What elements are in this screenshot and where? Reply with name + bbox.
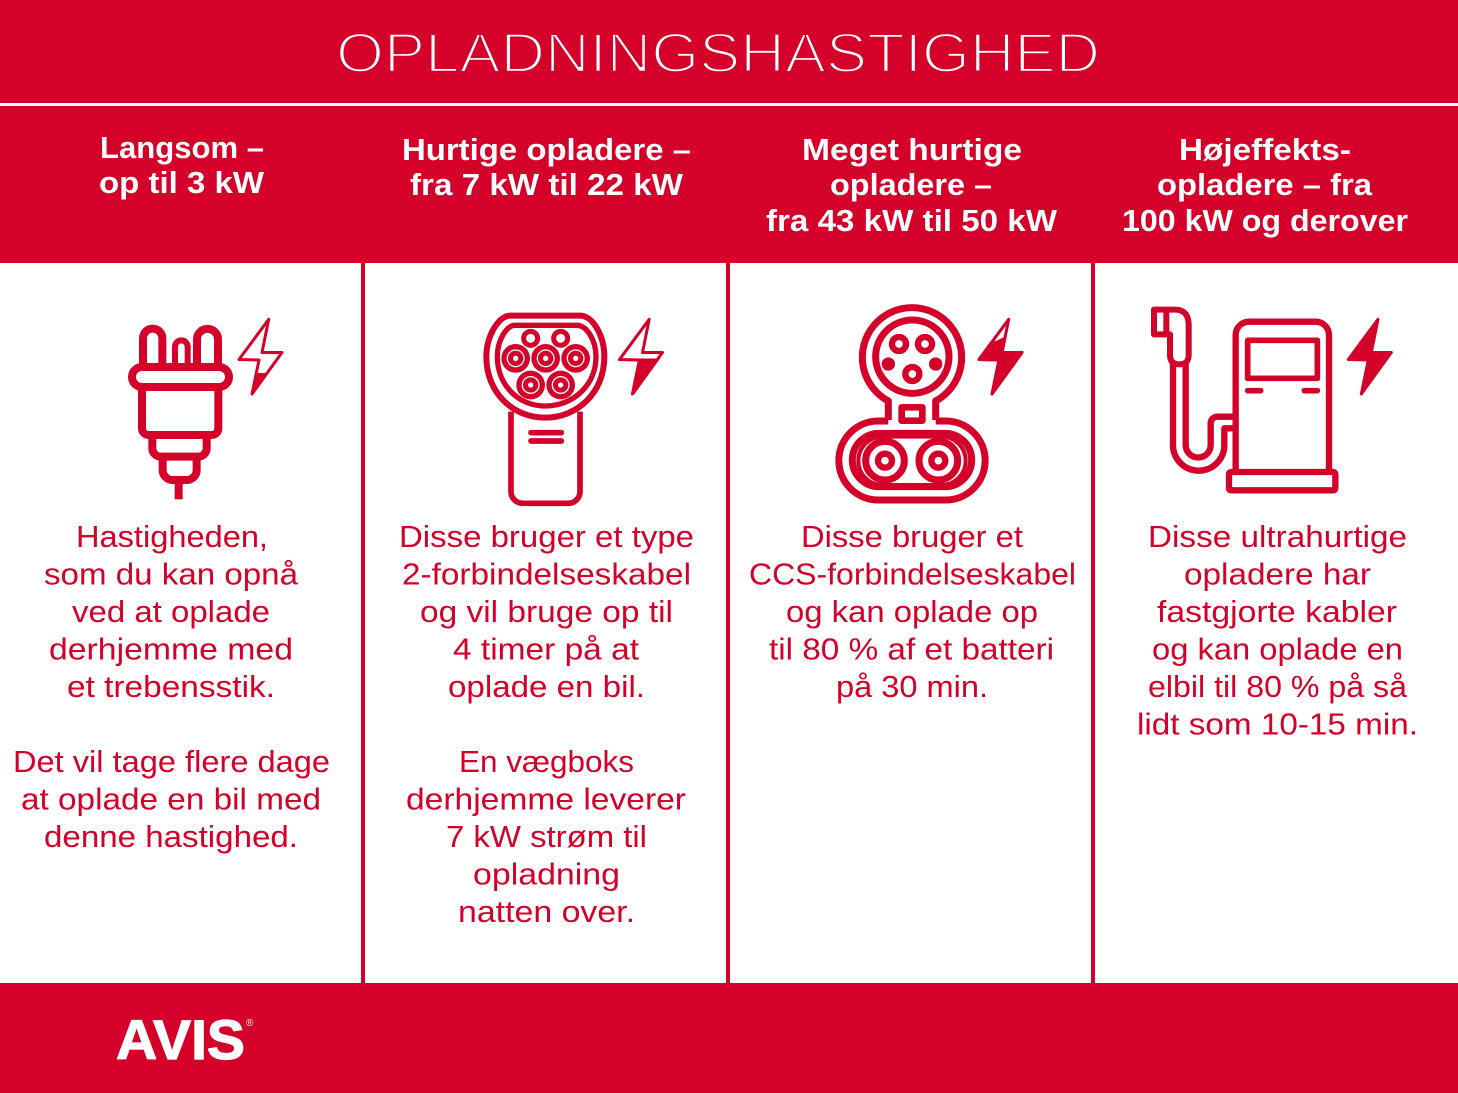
text: very fast chargers description xyxy=(749,520,1076,704)
text: very fast chargers description: Disse bruger et xyxy=(801,520,1024,554)
text: high power chargers description: opladere har xyxy=(1184,558,1371,592)
text: high power chargers description: fastgjorte kabler xyxy=(1157,595,1397,629)
panel: high power chargers xyxy=(1137,310,1418,742)
heading: high power chargers: opladere – fra xyxy=(1157,167,1373,202)
text: slow charging description xyxy=(13,520,330,854)
icon: CCS connector xyxy=(839,308,985,500)
heading: high power chargers: Højeffekts- xyxy=(1179,132,1351,167)
text: fast chargers description: 7 kW strøm til xyxy=(446,820,647,854)
icon: type 2 connector xyxy=(486,316,604,503)
heading: high power chargers: 100 kW og derover xyxy=(1122,203,1408,238)
header band xyxy=(0,0,1458,263)
heading: slow charging: op til 3 kW xyxy=(99,165,265,200)
text: slow charging description: at oplade en bil med xyxy=(21,782,321,816)
logo: AVIS: AVIS xyxy=(116,1008,245,1071)
icon: charging station xyxy=(1154,310,1335,490)
text: very fast chargers description: til 80 % af et batteri xyxy=(769,632,1054,666)
text: fast chargers description: 2-forbindelseskabel xyxy=(402,558,691,592)
text: fast chargers description: oplade en bil. xyxy=(448,670,645,704)
text: slow charging description: ved at oplade xyxy=(72,595,270,629)
text: very fast chargers description: CCS-forbindelseskabel xyxy=(749,558,1076,592)
heading: very fast chargers xyxy=(766,132,1058,238)
text: very fast chargers description: og kan oplade op xyxy=(786,595,1038,629)
logo: AVIS: ® xyxy=(246,1018,254,1029)
heading: very fast chargers: opladere – xyxy=(830,167,992,202)
heading: slow charging xyxy=(99,130,265,200)
icon: bolt mostly filled xyxy=(979,319,1022,394)
text: high power chargers description xyxy=(1137,520,1418,742)
text: fast chargers description: 4 timer på at xyxy=(453,632,640,666)
heading: high power chargers xyxy=(1122,132,1408,238)
text: slow charging description: Hastigheden, xyxy=(76,520,268,554)
icon: bolt quarter filled xyxy=(239,319,282,394)
heading: fast chargers: fra 7 kW til 22 kW xyxy=(410,167,684,202)
panel: very fast chargers xyxy=(749,308,1076,704)
heading: fast chargers: Hurtige opladere – xyxy=(402,132,691,167)
footer band xyxy=(0,983,1458,1093)
text: high power chargers description: elbil til 80 % på så xyxy=(1148,670,1407,704)
text: fast chargers description: En vægboks xyxy=(459,745,634,779)
text: fast chargers description: natten over. xyxy=(458,895,635,929)
icon: bolt half filled xyxy=(620,319,662,394)
text: slow charging description: denne hastighed. xyxy=(44,820,298,854)
text: high power chargers description: og kan oplade en xyxy=(1152,632,1403,666)
text: high power chargers description: lidt som 10-15 min. xyxy=(1137,708,1418,742)
text: fast chargers description: opladning xyxy=(473,858,620,892)
text: slow charging description: et trebensstik. xyxy=(67,670,275,704)
panel: fast chargers xyxy=(399,316,694,929)
icon: three-pin plug xyxy=(132,329,229,499)
text: slow charging description: som du kan opnå xyxy=(44,558,298,592)
text: slow charging description: Det vil tage flere dage xyxy=(13,745,330,779)
panel: slow charging xyxy=(13,319,330,854)
heading: very fast chargers: fra 43 kW til 50 kW xyxy=(766,203,1058,238)
text: fast chargers description: og vil bruge op til xyxy=(420,595,673,629)
title: OPLADNINGSHASTIGHED xyxy=(336,21,1100,84)
heading: very fast chargers: Meget hurtige xyxy=(802,132,1022,167)
icon: bolt fully filled xyxy=(1348,319,1391,394)
text: slow charging description: derhjemme med xyxy=(49,632,293,666)
text: fast chargers description: Disse bruger et type xyxy=(399,520,694,554)
text: fast chargers description: derhjemme leverer xyxy=(406,782,686,816)
text: high power chargers description: Disse ultrahurtige xyxy=(1148,520,1407,554)
heading: fast chargers xyxy=(402,132,691,202)
text: fast chargers description xyxy=(399,520,694,929)
heading: slow charging: Langsom – xyxy=(100,130,264,165)
text: very fast chargers description: på 30 min. xyxy=(836,670,988,704)
